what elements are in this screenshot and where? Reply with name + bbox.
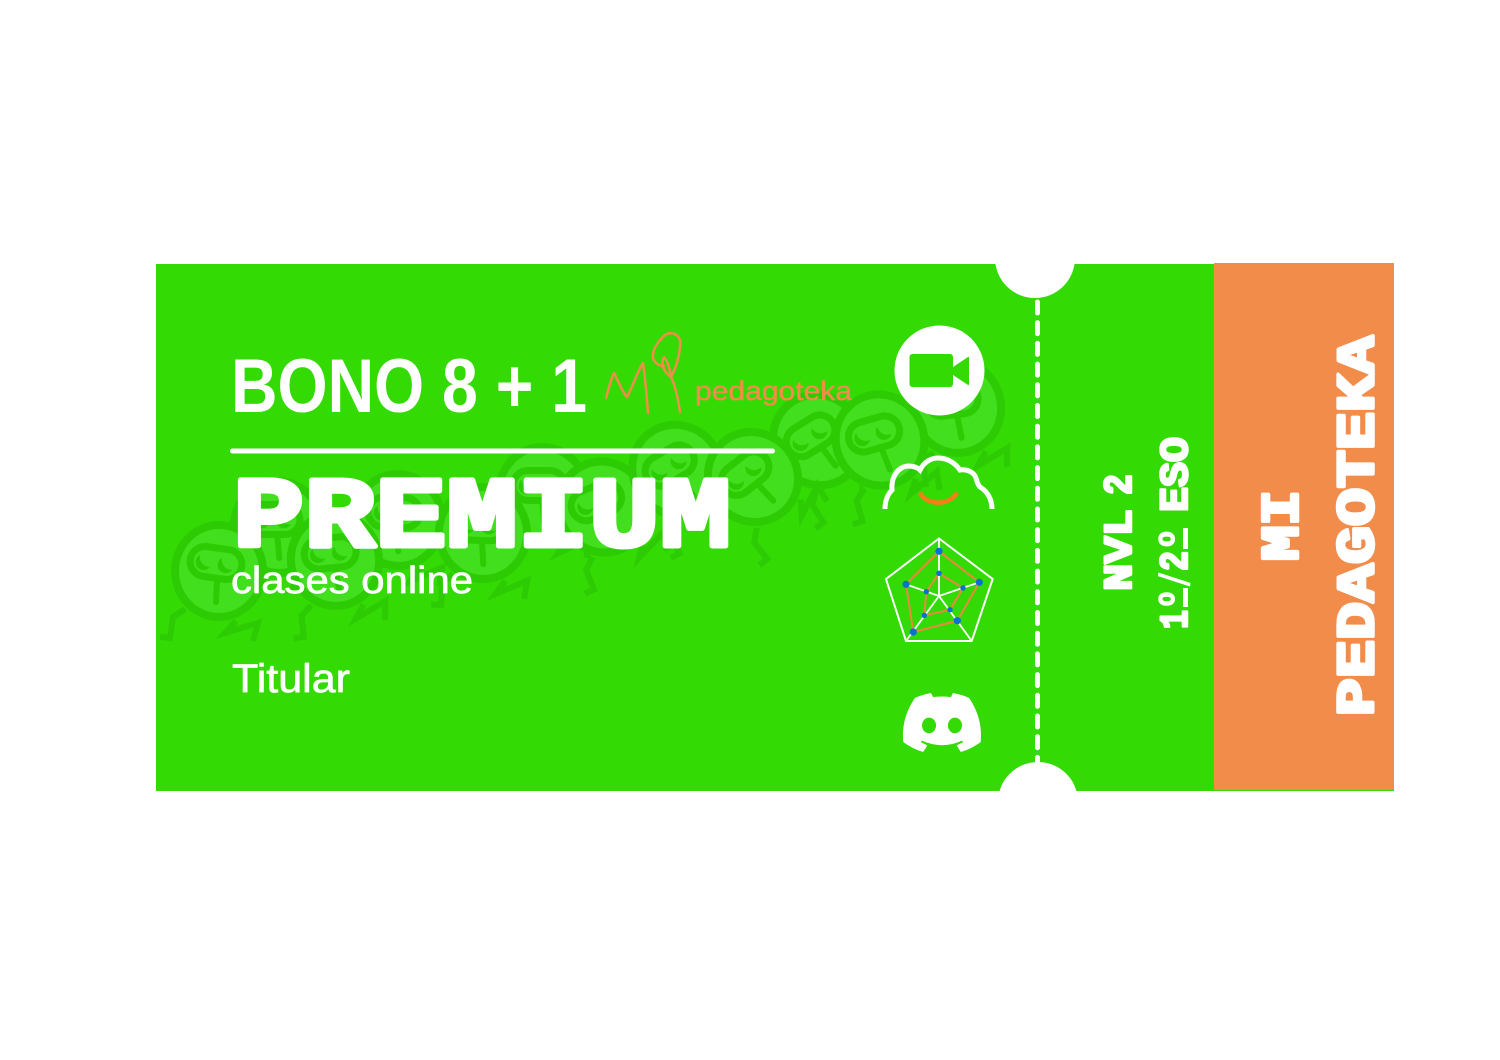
stub text: mi: MI: [1254, 490, 1314, 561]
stub text: course: ESO: [1155, 437, 1200, 512]
stub text: level: NVL: [1099, 509, 1144, 591]
icon: discord: [903, 693, 981, 752]
heading: premium: PREMIUM: [233, 464, 731, 577]
logo: mi pedagoteka: pedagoteka: [695, 376, 853, 406]
dashed tear line: [1035, 302, 1040, 762]
divider rule: [230, 448, 775, 454]
title: bono 8 + 1: BONO 8 + 1: [231, 344, 587, 429]
orange stub: [1214, 263, 1394, 790]
mascot watermark parade: [160, 352, 1017, 642]
ticket body: [156, 218, 1394, 842]
stub text: course: [1154, 437, 1202, 629]
stub text: pedagoteka: PEDAGOTEKA: [1329, 336, 1389, 716]
stub text: level: 2: [1099, 474, 1144, 495]
stub text: course: /: [1154, 572, 1202, 587]
logo: mi pedagoteka: [606, 333, 853, 413]
icon: radar chart: [886, 538, 993, 641]
subheading: clases online: clases online: [231, 560, 473, 602]
stub text: course: 1: [1155, 610, 1200, 629]
icon: video camera: [894, 326, 984, 416]
stub text: level: [1099, 474, 1144, 591]
notch: top: [995, 218, 1075, 298]
stub text: course: 2: [1155, 551, 1200, 571]
holder label: Titular: [232, 657, 350, 701]
stub text: course: º: [1155, 528, 1200, 550]
notch: bottom: [998, 762, 1078, 842]
stub text: course: º: [1155, 589, 1200, 609]
icon: cloud with smile: [885, 458, 992, 509]
